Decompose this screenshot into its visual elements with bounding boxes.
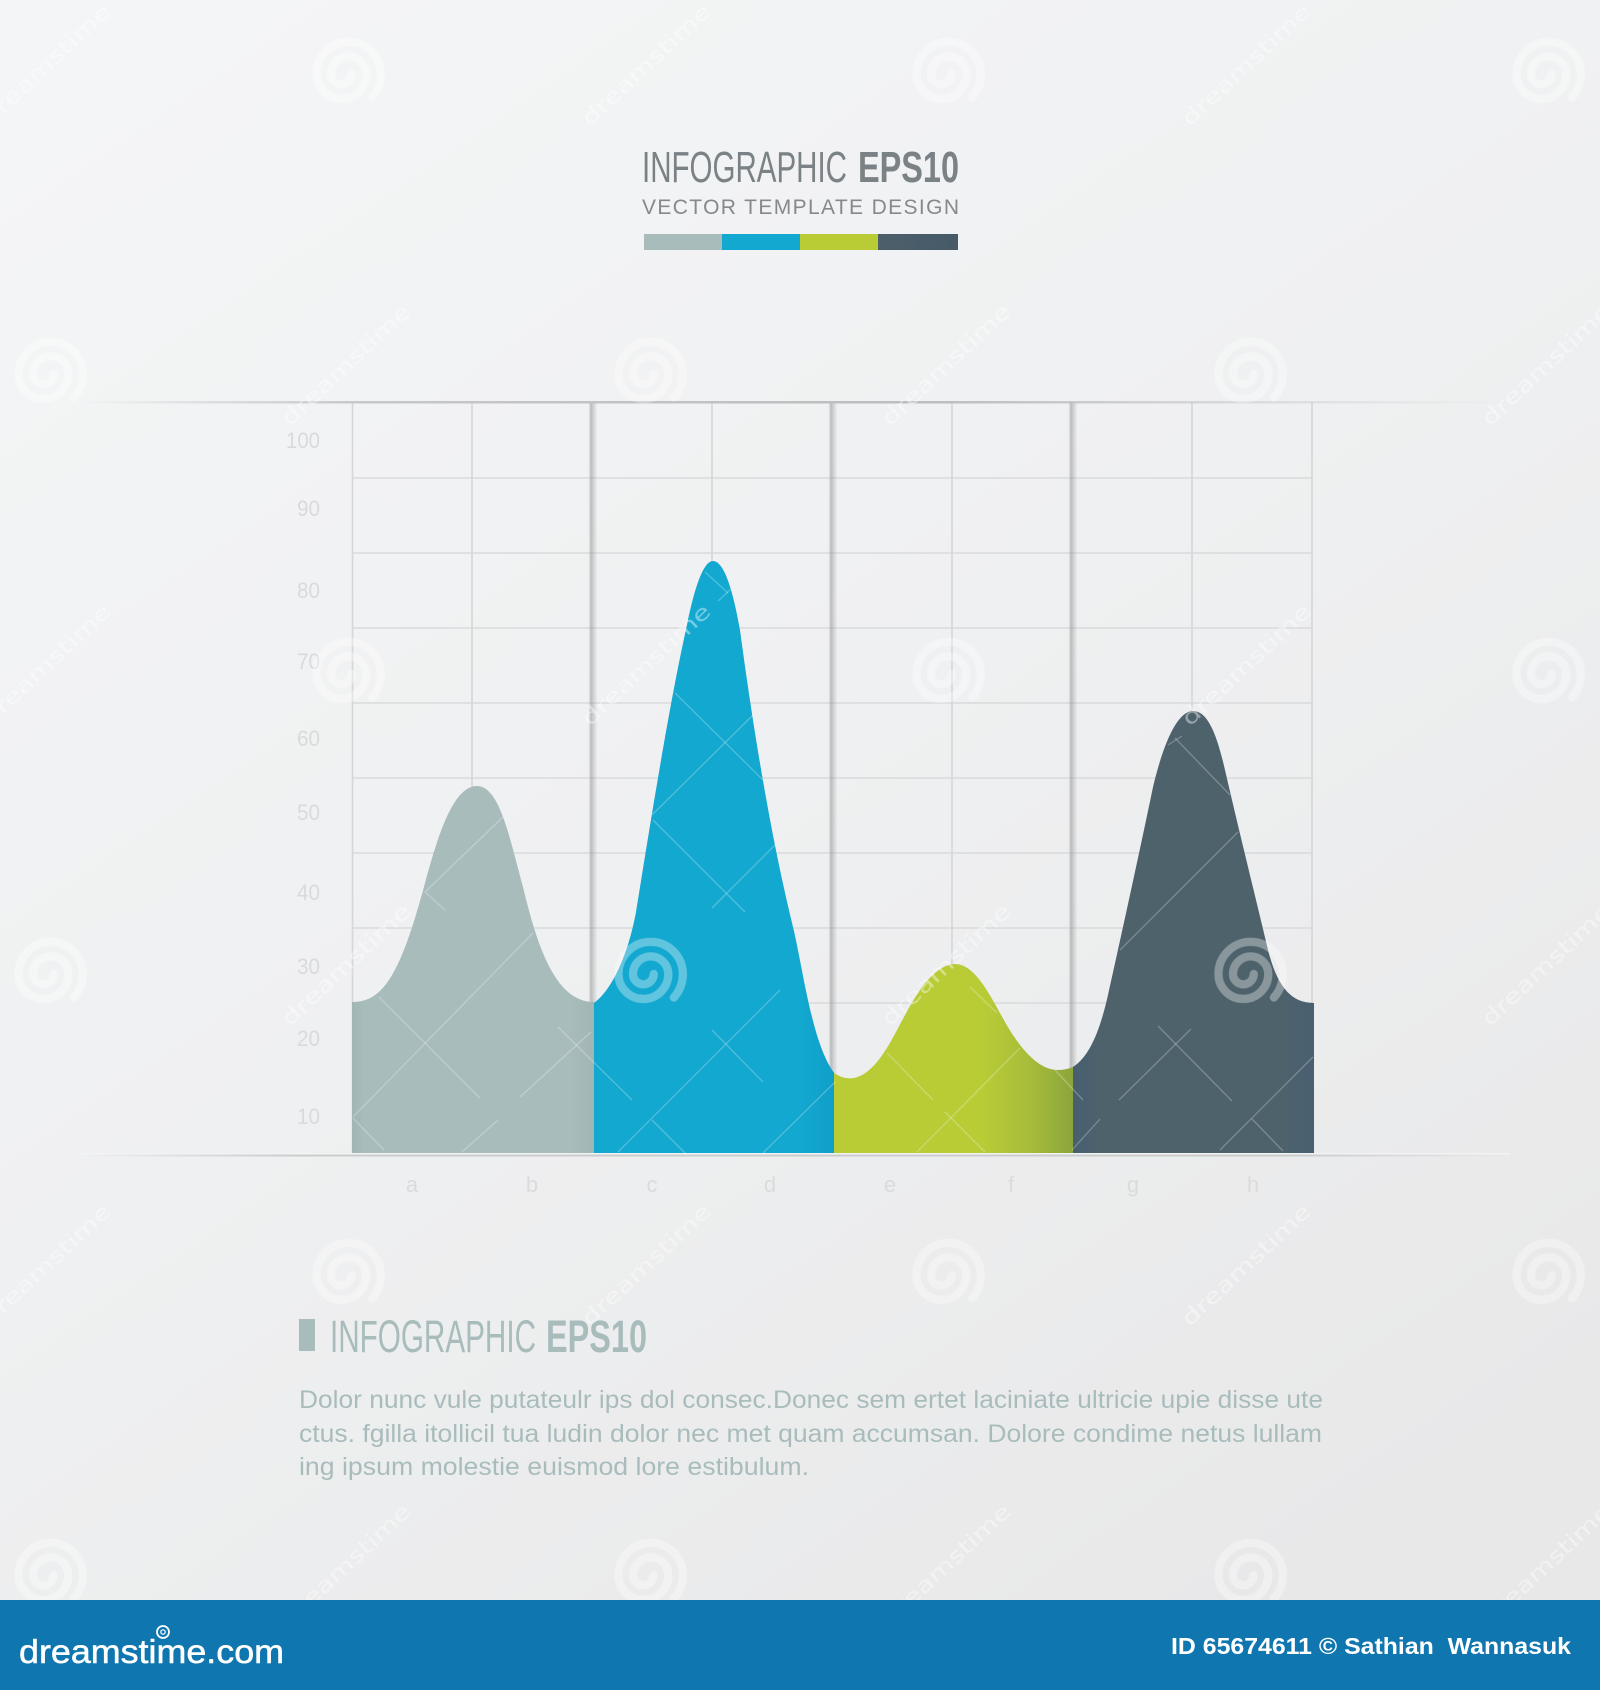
watermark text: dreamstime	[877, 899, 1016, 1031]
y axis labels: 10	[297, 1104, 320, 1129]
y axis labels: 40	[297, 880, 320, 905]
watermark text: dreamstime	[277, 1499, 416, 1631]
x axis labels: e	[884, 1172, 896, 1197]
x axis labels: d	[764, 1172, 776, 1197]
x axis labels: h	[1247, 1172, 1259, 1197]
blue peak area	[594, 561, 835, 1153]
watermark text: dreamstime	[277, 299, 416, 431]
watermark text: dreamstime	[1177, 1199, 1316, 1331]
y axis labels: 80	[297, 578, 320, 603]
watermark text: dreamstime	[277, 899, 416, 1031]
title: EPS10	[858, 143, 959, 192]
dark slate peak area	[1073, 711, 1314, 1153]
colour legend bar	[644, 234, 958, 250]
bottom heading marker	[299, 1319, 315, 1351]
x axis labels: a	[406, 1172, 419, 1197]
body paragraph: ctus. fgilla itollicil tua ludin dolor nec met quam accumsan. Dolore condime netus lullam	[299, 1420, 1322, 1448]
x axis labels: g	[1127, 1172, 1139, 1197]
bottom heading: EPS10	[546, 1311, 647, 1362]
chart grid	[80, 401, 1510, 1153]
watermark text: dreamstime	[577, 599, 716, 731]
y axis labels: 70	[297, 649, 320, 674]
footer credit: ID 65674611 © Sathian Wannasuk	[1171, 1633, 1572, 1659]
watermark text: dreamstime	[1177, 599, 1316, 731]
bottom heading: INFOGRAPHIC	[330, 1311, 536, 1362]
watermark text: dreamstime	[1477, 299, 1600, 431]
y axis labels: 100	[286, 428, 320, 453]
green peak area	[834, 964, 1073, 1153]
body paragraph	[299, 1386, 1323, 1481]
footer logo: dreamstime.com	[19, 1633, 284, 1670]
watermark cross lines	[353, 572, 1313, 1155]
watermark text: dreamstime	[1477, 1499, 1600, 1631]
watermark text: dreamstime	[577, 1199, 716, 1331]
watermark text: dreamstime	[577, 0, 716, 131]
x axis labels: b	[526, 1172, 538, 1197]
watermark text: dreamstime	[877, 1499, 1016, 1631]
grey peak area	[352, 786, 594, 1153]
watermark text: dreamstime	[877, 299, 1016, 431]
footer bar	[0, 1600, 1600, 1690]
subtitle: VECTOR TEMPLATE DESIGN	[642, 196, 959, 219]
x axis labels	[406, 1172, 1259, 1197]
watermark text: dreamstime	[1477, 899, 1600, 1031]
chart baseline	[80, 1153, 1510, 1156]
y axis labels: 50	[297, 800, 320, 825]
x axis labels: c	[646, 1172, 658, 1197]
body paragraph: Dolor nunc vule putateulr ips dol consec.Donec sem ertet laciniate ultricie upie disse ute	[299, 1386, 1323, 1414]
y axis labels: 90	[297, 496, 320, 521]
y axis labels: 60	[297, 726, 320, 751]
watermark text: dreamstime	[1177, 0, 1316, 131]
y axis labels: 30	[297, 954, 320, 979]
title: INFOGRAPHIC	[642, 143, 847, 192]
y axis labels	[286, 428, 320, 1129]
x axis labels: f	[1008, 1172, 1015, 1197]
body paragraph: ing ipsum molestie euismod lore estibulum.	[299, 1453, 809, 1481]
y axis labels: 20	[297, 1026, 320, 1051]
